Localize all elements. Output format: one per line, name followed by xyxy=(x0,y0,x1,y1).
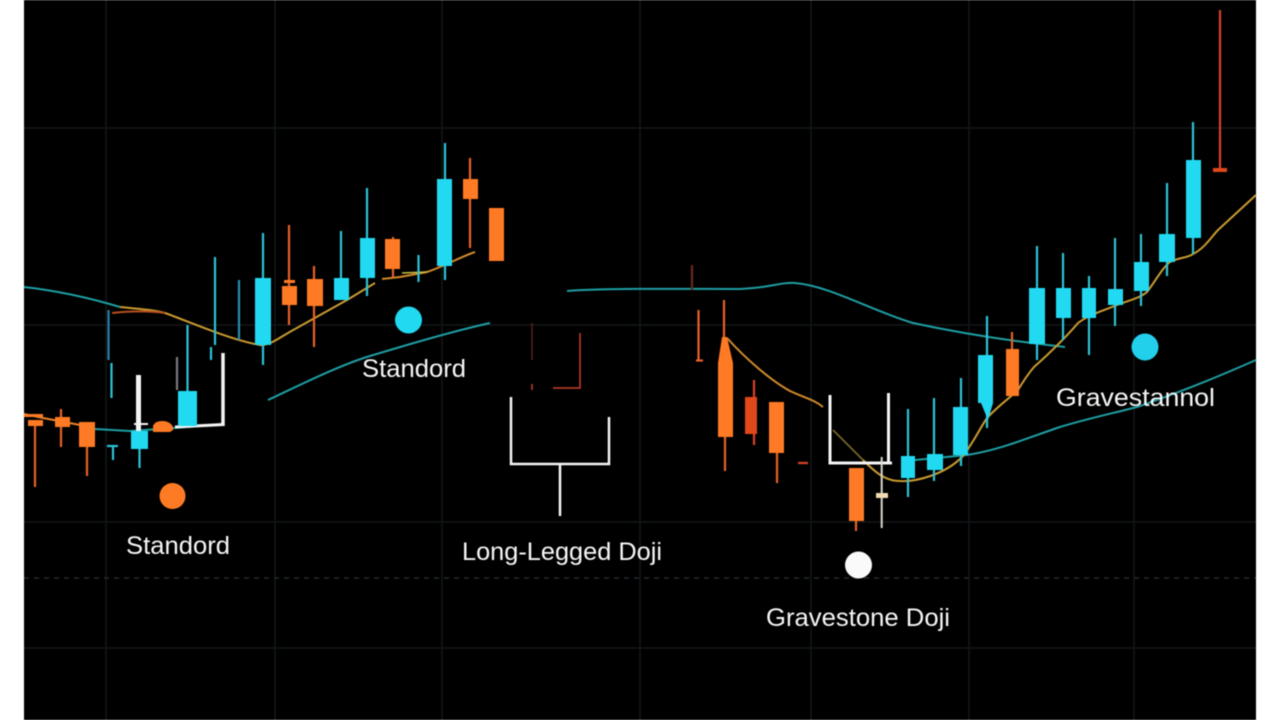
candle dash xyxy=(798,462,808,464)
candle xyxy=(385,237,400,278)
label: long-legged doji: Long-Legged Doji xyxy=(462,538,662,566)
candle xyxy=(1006,332,1019,396)
moving average lines: right xyxy=(567,195,1256,481)
candle xyxy=(153,421,173,432)
candle xyxy=(745,380,757,445)
candle xyxy=(55,409,70,447)
candle xyxy=(927,398,943,481)
label: gravestone upper: Gravestannol xyxy=(1056,384,1215,412)
candle xyxy=(1029,246,1045,360)
moving average lines: left xyxy=(24,252,490,431)
candle xyxy=(463,158,478,248)
left candlesticks xyxy=(24,143,504,487)
candle xyxy=(1056,253,1071,340)
candle xyxy=(901,409,915,497)
label: standard left: Standord xyxy=(126,532,230,560)
candle xyxy=(307,266,323,347)
candle xyxy=(1159,183,1175,276)
candle xyxy=(79,422,95,476)
label: standard upper: Standord xyxy=(362,355,466,383)
candle xyxy=(107,446,118,460)
marker: orange dot xyxy=(160,483,186,509)
center ghost bracket xyxy=(532,323,580,390)
candle xyxy=(769,402,784,483)
candle xyxy=(282,225,297,325)
candle xyxy=(131,431,148,468)
white bracket xyxy=(134,353,224,431)
doji candle xyxy=(876,457,888,528)
candle xyxy=(1082,276,1096,355)
candle xyxy=(417,255,420,282)
candle xyxy=(953,378,968,466)
candle xyxy=(24,414,43,487)
candle xyxy=(360,188,375,296)
label: gravestone doji: Gravestone Doji xyxy=(766,604,950,632)
marker: white dot xyxy=(845,552,872,578)
marker: cyan dot right xyxy=(1132,334,1158,360)
candle xyxy=(1134,234,1149,306)
candle xyxy=(849,468,864,531)
candle xyxy=(1108,238,1123,326)
candle xyxy=(334,231,349,300)
candle xyxy=(255,233,271,365)
candle xyxy=(1186,122,1201,254)
candle xyxy=(718,300,733,471)
gravestone candle xyxy=(1213,10,1227,172)
candle xyxy=(437,143,452,280)
candle xyxy=(177,325,197,426)
candle xyxy=(489,208,504,261)
candle wicks xyxy=(211,257,239,360)
candle xyxy=(978,316,993,428)
white bracket xyxy=(830,393,892,463)
candle wicks xyxy=(108,310,112,398)
long-legged doji diagram xyxy=(511,397,609,516)
marker: cyan dot xyxy=(395,306,422,334)
candle xyxy=(692,265,703,360)
right candlesticks xyxy=(692,10,1227,531)
